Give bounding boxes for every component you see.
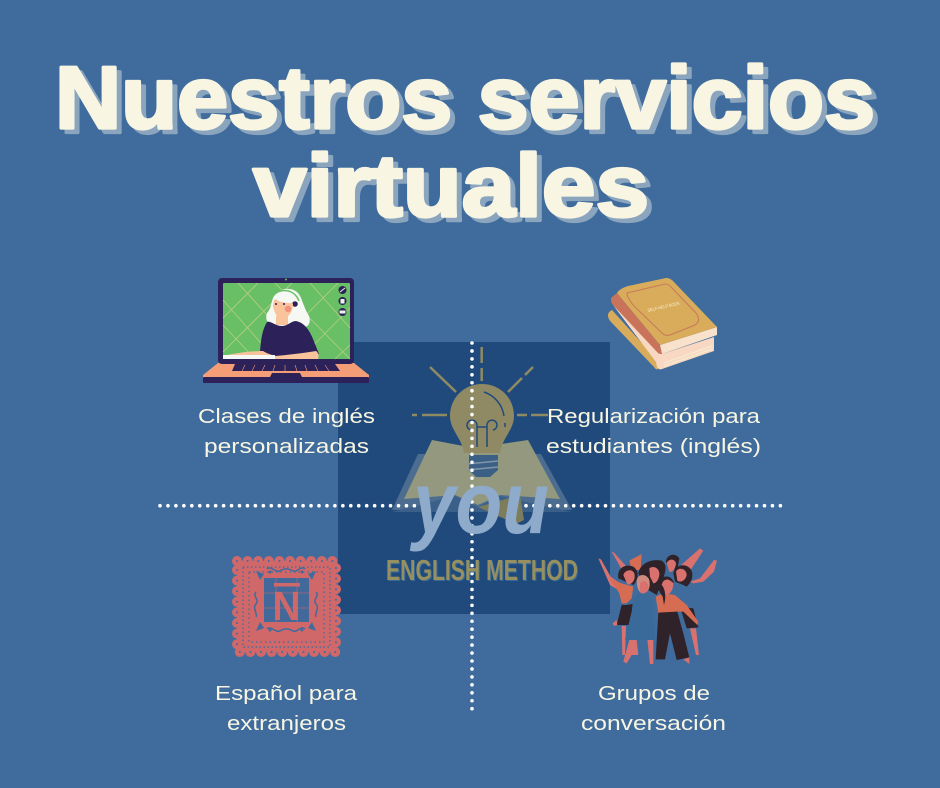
text: grupos de conversación xyxy=(581,682,726,735)
text: español para extranjeros: extranjeros xyxy=(227,712,346,735)
icon: stacked books: SELF-HELP BOOK xyxy=(647,301,680,313)
text: regularización para estudiantes: Regularización para xyxy=(547,405,761,428)
icon: stacked books xyxy=(608,278,717,369)
text: regularización para estudiantes xyxy=(546,405,761,458)
text: clases de inglés: Clases de inglés xyxy=(198,405,375,428)
dotted divider: vertical xyxy=(470,343,474,712)
title: Nuestros servicios xyxy=(55,48,875,147)
logo wordmark: english method: ENGLISH METHOD xyxy=(386,555,578,587)
logo wordmark: you: you xyxy=(410,453,549,552)
icon: papel picado with Ñ xyxy=(237,561,336,652)
icon: papel picado with Ñ: N xyxy=(272,583,300,629)
text: clases de inglés xyxy=(198,405,375,458)
icon: light bulb xyxy=(412,347,548,477)
title: virtuales xyxy=(258,140,654,240)
dotted divider: horizontal left xyxy=(160,504,418,508)
icon: laptop with video call xyxy=(203,278,369,383)
text: clases de inglés: personalizadas xyxy=(204,435,369,458)
text: regularización para estudiantes: estudiantes (inglés) xyxy=(546,435,761,458)
icon: group of people xyxy=(598,548,717,664)
panel: central logo square xyxy=(338,342,610,614)
title: virtuales xyxy=(253,136,649,235)
text: español para extranjeros: Español para xyxy=(215,682,358,705)
text: grupos de conversación: Grupos de xyxy=(598,682,710,705)
dotted divider: horizontal right xyxy=(526,504,785,508)
title xyxy=(55,48,880,240)
icon: logo book and light bulb xyxy=(392,347,572,524)
text: grupos de conversación: conversación xyxy=(581,712,726,735)
title: Nuestros servicios xyxy=(60,52,880,152)
logo wordmark: english method: ENGLISH METHOD xyxy=(387,556,579,588)
text: español para extranjeros xyxy=(215,682,358,735)
